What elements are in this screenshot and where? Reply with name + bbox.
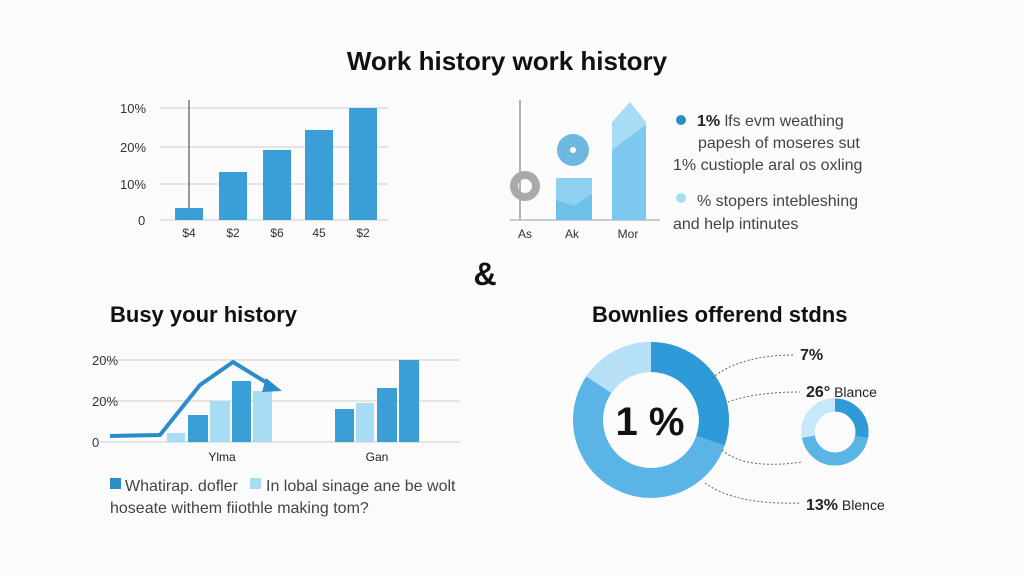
chart: bottom-left grouped bars: 20% [92,353,118,368]
chart: bottom-left grouped bars: 20% [92,394,118,409]
title: Work history work history [347,46,668,76]
chart: top-left bar chart: $2 [226,226,240,240]
chart: top-middle shapes: Ak [565,227,580,241]
chart: bottom-left grouped bars: Gan [366,450,388,464]
chart: bottom-left grouped bars [92,353,460,464]
heading: busy your history: Busy your history [110,302,298,327]
chart: top-middle shapes [510,100,660,241]
chart: top-left bar chart: 10% [120,177,146,192]
heading: donut section: Bownlies offerend stdns [592,302,847,327]
legend: top-right text: and help intinutes [673,216,798,233]
chart: top-middle shapes: As [518,227,532,241]
legend: top-right text [673,113,862,233]
chart: top-left bar chart [120,100,388,240]
chart: top-left bar chart: $2 [356,226,370,240]
donut labels: 26° Blance [806,384,877,401]
donut labels: 7% [800,347,823,364]
legend: bottom-left [110,478,456,517]
chart: top-left bar chart: 45 [312,226,326,240]
chart: top-left bar chart: $4 [182,226,196,240]
chart: small donut [808,405,862,459]
chart: top-left bar chart: 20% [120,140,146,155]
ampersand: & [473,256,497,292]
chart: large donut: 1 % [616,400,684,444]
legend: bottom-left: hoseate withem fiiothle making tom? [110,500,369,517]
chart: top-left bar chart: 0 [138,213,145,228]
chart: bottom-left grouped bars: Ylma [208,450,236,464]
chart: top-middle shapes: Mor [618,227,638,241]
legend: top-right text: 1% lfs evm weathing [697,113,844,130]
legend: top-right text: papesh of moseres sut [698,135,860,152]
donut labels [800,347,885,514]
chart: large donut [588,357,714,483]
chart: top-left bar chart: $6 [270,226,284,240]
legend: bottom-left: In lobal sinage ane be wolt [266,478,456,495]
legend: top-right text: % stopers intebleshing [697,193,858,210]
chart: top-left bar chart: 10% [120,101,146,116]
legend: top-right text: 1% custiople aral os oxling [673,157,862,174]
donut labels: 13% Blence [806,497,885,514]
chart: bottom-left grouped bars: 0 [92,435,99,450]
callout lines [705,355,802,503]
legend: bottom-left: Whatirap. dofler [125,478,239,495]
